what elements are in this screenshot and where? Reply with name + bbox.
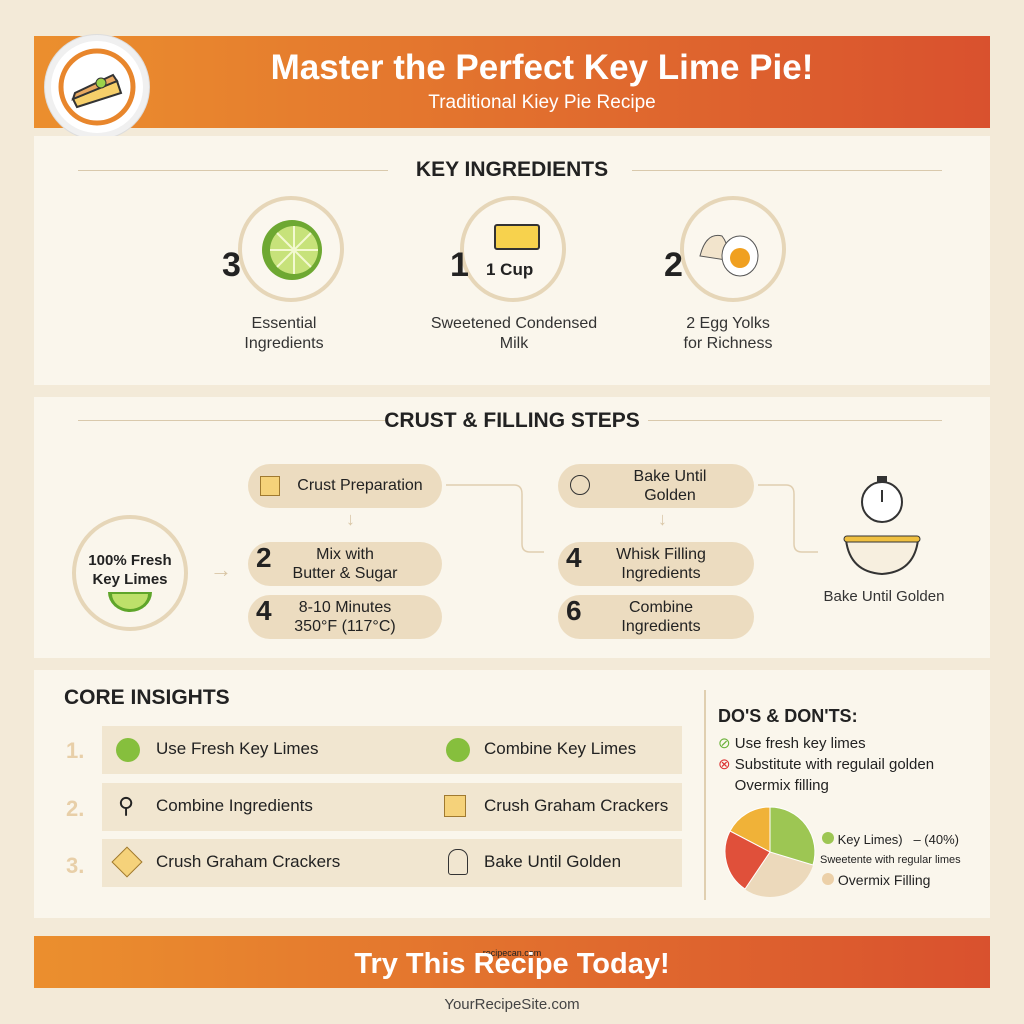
insight rows — [66, 726, 682, 887]
step: bake time: 4 — [256, 595, 272, 626]
insight rows: Crush Graham Crackers — [156, 852, 340, 871]
step: bake time: 350°F (117°C) — [294, 618, 396, 635]
badge: 100% fresh key limes: 100% Fresh — [88, 552, 172, 569]
icon: pie logo — [45, 35, 149, 139]
pie legend: Sweetente with regular limes — [820, 854, 961, 866]
footer banner — [34, 936, 990, 988]
step: whisk: 4 — [566, 542, 582, 573]
do's and don'ts: ⊘ Use fresh key limes — [718, 735, 866, 752]
insight rows: Combine Ingredients — [156, 796, 313, 815]
connector arrow — [446, 484, 544, 553]
step: whisk: Ingredients — [621, 565, 701, 582]
step: mix: Mix with — [316, 546, 374, 563]
heading: CRUST & FILLING STEPS — [384, 409, 640, 432]
panel: crust & filling steps — [34, 397, 990, 658]
insight rows: 1. — [66, 738, 84, 763]
do's and don'ts: ⊗ Substitute with regulail golden — [718, 756, 934, 773]
ingredient: limes — [222, 196, 344, 352]
step: bake time: 8-10 Minutes — [299, 599, 391, 616]
panel: key ingredients — [34, 136, 990, 385]
pie legend: Overmix Filling — [838, 872, 930, 888]
step: crust preparation: Crust Preparation — [297, 477, 423, 494]
icon: timer and bowl — [844, 476, 920, 575]
ingredient: limes: Essential — [252, 315, 316, 332]
step: whisk — [558, 542, 754, 586]
step: combine — [558, 595, 754, 639]
ingredient: egg yolks — [664, 196, 786, 352]
step: bake until golden: Golden — [644, 487, 696, 504]
step: mix: 2 — [256, 542, 272, 573]
title: Master the Perfect Key Lime Pie! — [271, 48, 813, 87]
badge: 100% fresh key limes: Key Limes — [92, 571, 168, 588]
step: whisk: Whisk Filling — [616, 546, 706, 563]
heading: CORE INSIGHTS — [64, 686, 230, 709]
step: bake until golden: Bake Until — [634, 468, 706, 485]
pie legend — [820, 832, 961, 888]
step: combine: 6 — [566, 595, 582, 626]
do's and don'ts: Overmix filling — [735, 777, 829, 794]
subtitle: Traditional Kiey Pie Recipe — [428, 92, 656, 113]
insight rows: Combine Key Limes — [484, 739, 636, 758]
footer site: YourRecipeSite.com — [444, 996, 580, 1013]
panel: crust & filling steps: ↓ — [346, 509, 355, 529]
insight rows: Use Fresh Key Limes — [156, 739, 318, 758]
step: combine: Combine — [629, 599, 693, 616]
footer banner: recipecan.com — [483, 948, 541, 958]
insight rows: Crush Graham Crackers — [484, 796, 668, 815]
step: mix — [248, 542, 442, 586]
pie legend: Key Limes) – (40%) — [838, 832, 959, 847]
insight rows: 2. — [66, 796, 84, 821]
ingredient: condensed milk: Sweetened Condensed — [431, 315, 597, 332]
step: bake time — [248, 595, 442, 639]
footer banner: Try This Recipe Today! — [354, 948, 670, 980]
ingredient: egg yolks: for Richness — [684, 335, 772, 352]
step: crust preparation — [248, 464, 442, 508]
insight rows: Bake Until Golden — [484, 852, 621, 871]
heading: KEY INGREDIENTS — [416, 158, 608, 181]
ingredient: egg yolks: 2 — [664, 246, 683, 284]
panel: crust & filling steps: Bake Until Golden — [824, 588, 944, 605]
ingredient: limes: 3 — [222, 246, 241, 284]
ingredient: egg yolks: 2 Egg Yolks — [686, 315, 770, 332]
step: mix: Butter & Sugar — [293, 565, 397, 582]
panel: crust & filling steps: ↓ — [658, 509, 667, 529]
panel: core insights — [34, 670, 990, 918]
ingredient: condensed milk: 1 — [450, 246, 469, 284]
step: combine: Ingredients — [621, 618, 701, 635]
pie chart — [724, 806, 816, 897]
do's and don'ts — [718, 706, 934, 794]
arrow: → — [210, 557, 232, 582]
ingredient: condensed milk — [431, 196, 597, 352]
header banner — [34, 36, 990, 128]
step: bake until golden — [558, 464, 754, 508]
do's and don'ts: DO'S & DON'TS: — [718, 706, 858, 726]
ingredient: condensed milk: Milk — [500, 335, 528, 352]
badge: 100% fresh key limes — [72, 515, 188, 631]
insight rows: ⚲ — [118, 793, 134, 818]
ingredient: condensed milk: 1 Cup — [486, 260, 533, 279]
ingredient: limes: Ingredients — [244, 335, 324, 352]
insight rows: 3. — [66, 853, 84, 878]
